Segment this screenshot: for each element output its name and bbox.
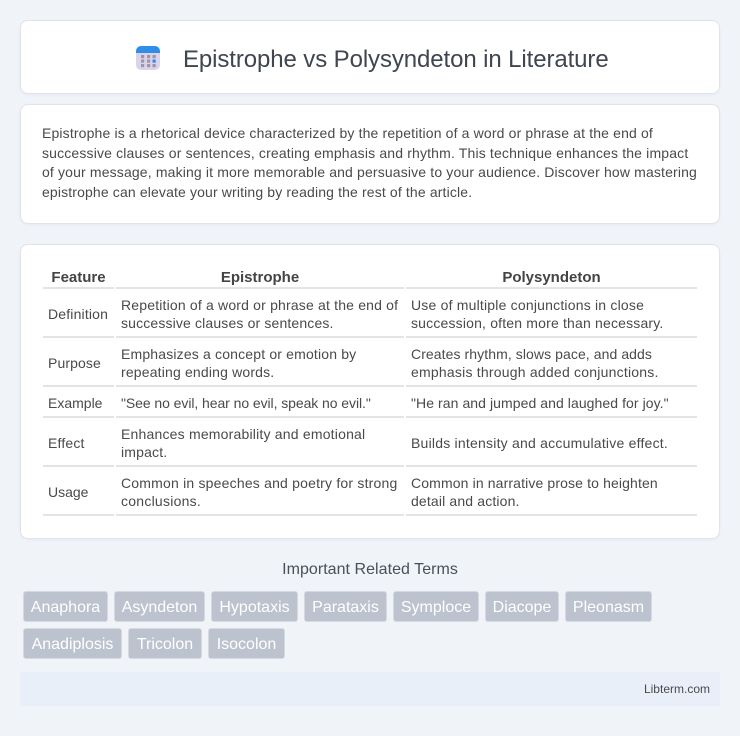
comparison table panel: [20, 244, 720, 539]
related terms heading: Important Related Terms: [282, 561, 458, 578]
related terms tags: Anaphora: [31, 599, 100, 616]
row: effect: Enhances memorability and emotional: [121, 426, 365, 442]
comparison table: [43, 269, 697, 516]
row: purpose: Creates rhythm, slows pace, and adds: [411, 346, 652, 362]
row: definition: [48, 297, 663, 331]
row: usage: detail and action.: [411, 493, 520, 509]
title: Epistrophe vs Polysyndeton in Literature: [183, 46, 609, 73]
related terms tags: Parataxis: [312, 599, 379, 616]
row: purpose: emphasis through added conjunctions.: [411, 364, 659, 380]
row: example: "He ran and jumped and laughed for joy.": [411, 395, 669, 411]
row: example: Example: [48, 395, 102, 411]
footer credit: Libterm.com: [644, 682, 710, 696]
row: definition: succession, often more than necessary.: [411, 315, 663, 331]
intro text: successive clauses or sentences, creating emphasis and rhythm. This technique enhances the impact: [42, 145, 688, 161]
related terms tags: Hypotaxis: [219, 599, 290, 616]
row: usage: [48, 475, 658, 509]
related terms tags: [23, 591, 652, 659]
row: usage: Common in speeches and poetry for strong: [121, 475, 397, 491]
row: effect: Builds intensity and accumulative effect.: [411, 435, 668, 451]
table header: Epistrophe: [221, 269, 299, 286]
table header: Polysyndeton: [502, 269, 601, 286]
related terms tags: Pleonasm: [573, 599, 644, 616]
table header: [51, 269, 601, 286]
related terms tags: Tricolon: [137, 636, 193, 653]
intro text: epistrophe can elevate your writing by reading the rest of the article.: [42, 184, 472, 200]
row: purpose: repeating ending words.: [121, 364, 274, 380]
icon: calendar app: [136, 46, 160, 70]
row: example: [48, 395, 669, 411]
header card: [20, 20, 720, 94]
row: example: "See no evil, hear no evil, speak no evil.": [121, 395, 371, 411]
row: effect: impact.: [121, 444, 167, 460]
related terms tags: Diacope: [493, 599, 551, 616]
related terms tags: Anadiplosis: [32, 636, 113, 653]
intro text: Epistrophe is a rhetorical device characterized by the repetition of a word or phrase at the end of: [42, 125, 653, 141]
row: definition: Definition: [48, 306, 108, 322]
row: definition: successive clauses or sentences.: [121, 315, 334, 331]
row: usage: conclusions.: [121, 493, 201, 509]
row: definition: Repetition of a word or phrase at the end of: [121, 297, 398, 313]
intro panel: [20, 104, 720, 224]
row: purpose: [48, 346, 659, 380]
row: effect: Effect: [48, 435, 85, 451]
row: effect: [48, 426, 668, 460]
related terms tags: Isocolon: [217, 636, 276, 653]
intro text: of your message, making it more memorable and persuasive to your audience. Discover how mastering: [42, 164, 697, 180]
row: purpose: Emphasizes a concept or emotion by: [121, 346, 356, 362]
table header: Feature: [51, 269, 106, 286]
row: definition: Use of multiple conjunctions in close: [411, 297, 644, 313]
intro text: [42, 125, 697, 200]
row: usage: Common in narrative prose to heighten: [411, 475, 658, 491]
row: purpose: Purpose: [48, 355, 101, 371]
row: usage: Usage: [48, 484, 88, 500]
related terms tags: Symploce: [401, 599, 471, 616]
related terms tags: Asyndeton: [122, 599, 197, 616]
footer bar: [20, 672, 720, 706]
